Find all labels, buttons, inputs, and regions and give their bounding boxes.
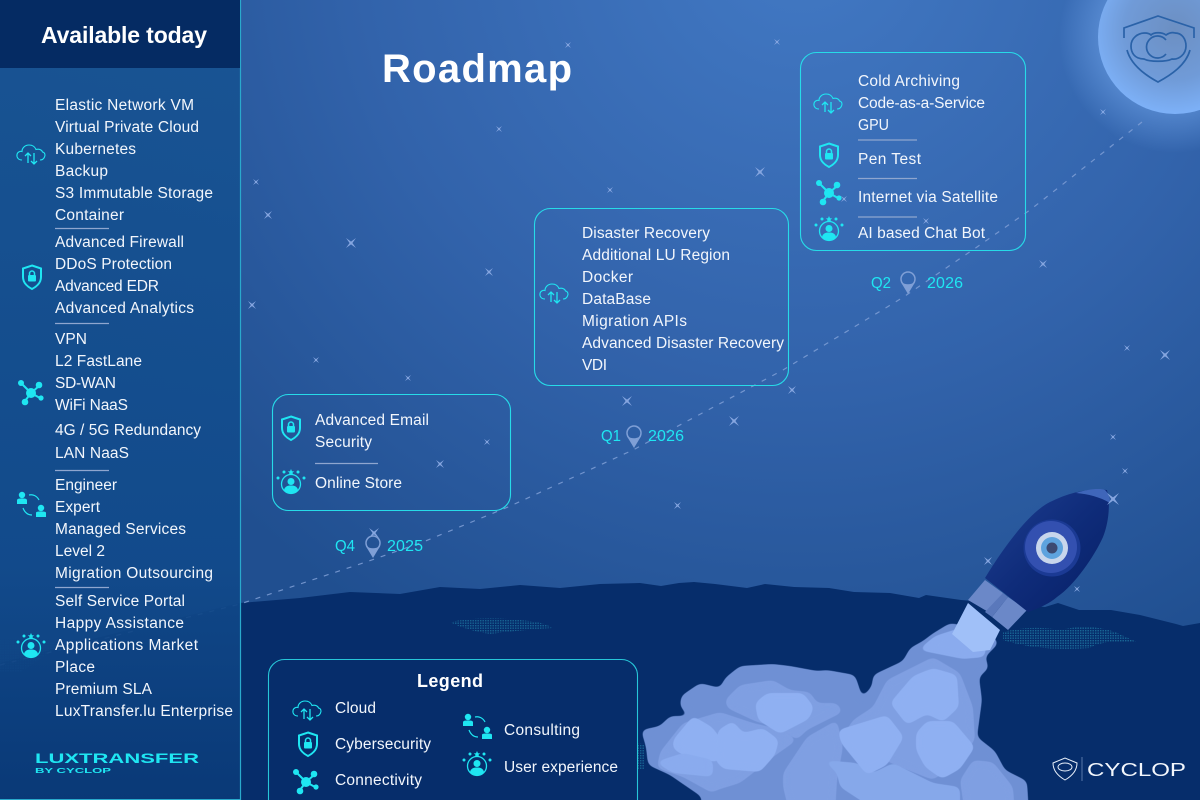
sidebar: consulting services xyxy=(17,477,213,588)
sidebar: connectivity services xyxy=(18,331,201,470)
marker: Q1 2026: 2026 xyxy=(648,428,684,445)
marker: Q2 2026 xyxy=(871,272,963,294)
sidebar: cybersecurity services xyxy=(23,234,194,324)
card: Q4 2025: Online Store xyxy=(315,475,402,492)
speckled ground texture xyxy=(0,618,1137,770)
card: Q1 2026: VDI xyxy=(582,357,607,374)
moon with logo xyxy=(1059,0,1200,153)
rocket xyxy=(952,489,1110,652)
sidebar: user experience services: LuxTransfer.lu Enterprise xyxy=(55,703,233,720)
card: Q1 2026: Additional LU Region xyxy=(582,247,730,264)
sidebar: cloud services xyxy=(17,97,213,228)
marker: Q1 2026: Q1 xyxy=(601,428,621,445)
marker: Q4 2025: Q4 xyxy=(335,538,355,555)
legend xyxy=(268,660,638,800)
sidebar: cybersecurity services: Advanced Analytics xyxy=(55,300,194,317)
sidebar: connectivity services: WiFi NaaS xyxy=(55,397,128,414)
sidebar: cloud services: Container xyxy=(55,207,124,224)
star on rocket tip xyxy=(1107,493,1119,505)
card: Q2 2026: AI based Chat Bot xyxy=(858,225,986,242)
card: Q2 2026: Internet via Satellite xyxy=(858,189,998,206)
marker: Q4 2025: 2025 xyxy=(387,538,423,555)
sidebar: consulting services: Managed Services xyxy=(55,521,186,538)
marker: Q2 2026: 2026 xyxy=(927,275,963,292)
sidebar: cloud services: Kubernetes xyxy=(55,141,136,158)
card: Q1 2026: Docker xyxy=(582,269,633,286)
card: Q1 2026 xyxy=(534,208,788,386)
sidebar: cybersecurity services: DDoS Protection xyxy=(55,256,172,273)
sidebar: user experience services: Self Service Portal xyxy=(55,593,185,610)
marker: Q2 2026: Q2 xyxy=(871,275,891,292)
card: Q1 2026: Migration APIs xyxy=(582,313,687,330)
marker: Q4 2025 xyxy=(335,536,423,558)
stars xyxy=(248,39,1170,592)
luxtransfer logo: LUXTRANSFER xyxy=(35,750,199,766)
sidebar: connectivity services: SD-WAN xyxy=(55,375,116,392)
sidebar: cybersecurity services: Advanced EDR xyxy=(55,278,159,295)
flight path xyxy=(0,122,1142,665)
smoke cloud xyxy=(641,623,1029,800)
sidebar: cloud services: Elastic Network VM xyxy=(55,97,194,114)
sidebar: user experience services: Premium SLA xyxy=(55,681,153,698)
legend: Connectivity xyxy=(335,772,422,789)
sidebar: cloud services: S3 Immutable Storage xyxy=(55,185,213,202)
sidebar: connectivity services: LAN NaaS xyxy=(55,445,129,462)
card: Q4 2025 xyxy=(272,394,510,510)
sidebar: user experience services: Place xyxy=(55,659,95,676)
sidebar heading xyxy=(0,0,240,68)
card: Q1 2026: DataBase xyxy=(582,291,651,308)
title: Roadmap xyxy=(382,47,572,91)
legend: Cloud xyxy=(335,700,376,717)
hills xyxy=(0,582,1200,800)
marker: Q1 2026 xyxy=(601,426,684,448)
card: Q4 2025: Security xyxy=(315,434,372,451)
sidebar: user experience services xyxy=(16,593,233,720)
card: Q2 2026: GPU xyxy=(858,117,889,134)
sidebar: consulting services: Level 2 xyxy=(55,543,105,560)
card: Q1 2026: Advanced Disaster Recovery xyxy=(582,335,784,352)
sidebar: consulting services: Migration Outsourcing xyxy=(55,565,213,582)
sidebar: connectivity services: VPN xyxy=(55,331,87,348)
left panel xyxy=(0,0,240,800)
sidebar: connectivity services: 4G / 5G Redundancy xyxy=(55,422,201,439)
legend: Consulting xyxy=(504,722,580,739)
card: Q2 2026: Pen Test xyxy=(858,151,922,168)
cyclop logo: CYCLOP xyxy=(1087,760,1186,780)
sidebar: cybersecurity services: Advanced Firewall xyxy=(55,234,184,251)
legend: Legend xyxy=(417,671,483,691)
legend: User experience xyxy=(504,759,618,776)
luxtransfer logo xyxy=(35,750,199,775)
luxtransfer logo: BY CYCLOP xyxy=(35,766,111,775)
sidebar: consulting services: Engineer xyxy=(55,477,117,494)
sidebar heading: Available today xyxy=(41,22,207,48)
sidebar: cloud services: Virtual Private Cloud xyxy=(55,119,199,136)
sidebar: connectivity services: L2 FastLane xyxy=(55,353,142,370)
sidebar: user experience services: Applications Market xyxy=(55,637,199,654)
card: Q2 2026: Cold Archiving xyxy=(858,73,960,90)
sidebar: cloud services: Backup xyxy=(55,163,108,180)
sidebar: consulting services: Expert xyxy=(55,499,101,516)
card: Q2 2026: Code-as-a-Service xyxy=(858,95,985,112)
cyclop logo xyxy=(1053,757,1186,781)
sidebar: user experience services: Happy Assistance xyxy=(55,615,184,632)
card: Q4 2025: Advanced Email xyxy=(315,412,429,429)
card: Q1 2026: Disaster Recovery xyxy=(582,225,710,242)
card: Q2 2026 xyxy=(800,52,1026,250)
legend: Cybersecurity xyxy=(335,736,431,753)
